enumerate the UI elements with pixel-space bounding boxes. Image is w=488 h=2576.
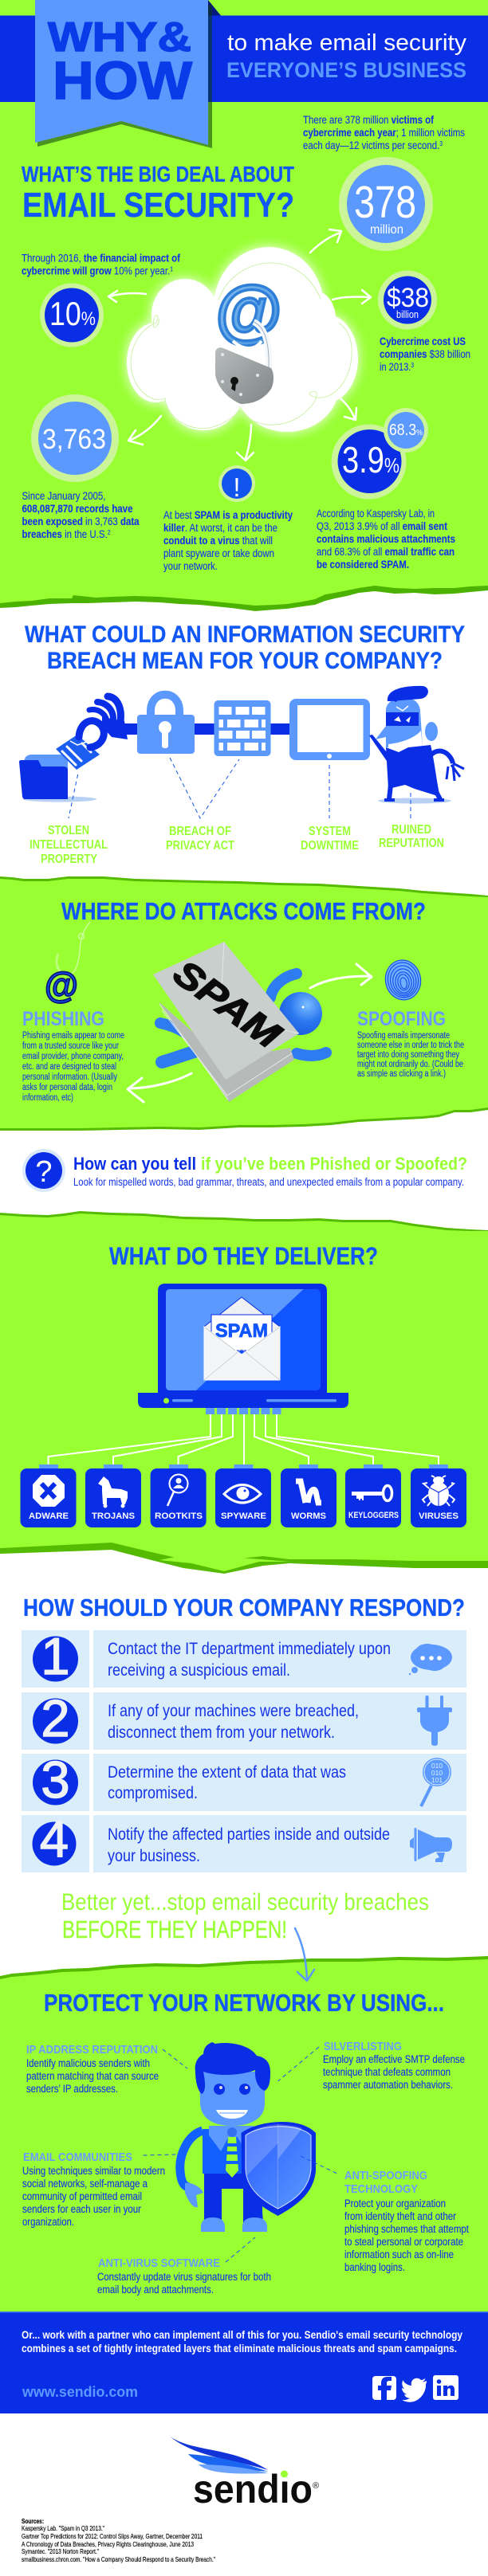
icon: folder <box>19 755 96 802</box>
text: silverlisting: Employ an effective SMTP defense <box>323 2053 465 2065</box>
text: silverlisting: technique that defeats common <box>323 2066 451 2078</box>
text: spoofing: as simple as clicking a link.) <box>357 1069 446 1079</box>
sources: Sources: <box>22 2517 44 2525</box>
text: financial impact: cybercrime will grow 10% per year. <box>22 265 181 277</box>
arrow: to phishing <box>128 1073 191 1102</box>
icon: plug <box>417 1696 452 1746</box>
section: deliver <box>0 1211 488 1574</box>
text: records: 608,087,870 records have <box>22 503 133 515</box>
arrow: to spam alert <box>237 425 254 461</box>
label: downtime: DOWNTIME <box>301 839 359 853</box>
step 3: 3 <box>41 1751 70 1809</box>
card: worms: WORMS <box>291 1511 326 1521</box>
stat: 3.9 percent: 3.9% <box>342 439 399 480</box>
step 3: compromised. <box>108 1784 198 1802</box>
icon: exclamation: ! <box>233 472 241 502</box>
sources: Symantec. "2013 Norton Report." <box>22 2547 99 2555</box>
text: email communities: Using techniques similar to modern <box>22 2165 165 2177</box>
stat: 3.9 percent <box>332 424 407 499</box>
labels: impacts <box>30 758 444 866</box>
text: anti-spoofing: to steal personal or corporate <box>344 2236 463 2248</box>
callout lines <box>144 2047 339 2262</box>
shield <box>241 2122 316 2216</box>
step 1: 1 <box>41 1627 70 1685</box>
text: anti-spoofing: banking logins. <box>344 2261 405 2273</box>
text: IP reputation <box>26 2043 159 2095</box>
text: spam: At best SPAM is a productivity <box>163 509 293 521</box>
text: IP reputation: pattern matching that can source <box>26 2070 159 2082</box>
title: how: HOW <box>53 51 193 111</box>
step 1 <box>22 1627 466 1688</box>
text: victims: 3 <box>439 140 443 147</box>
step 1: receiving a suspicious email. <box>108 1661 290 1680</box>
sources: Kaspersky Lab. "Spam in Q3 2013." <box>22 2524 104 2532</box>
stat: 3,763 <box>31 394 119 482</box>
heading: breach: BREACH MEAN FOR YOUR COMPANY? <box>47 648 443 674</box>
text: records: 2 <box>108 529 111 536</box>
card: keyloggers <box>345 1464 401 1527</box>
heading: big deal <box>22 162 294 225</box>
text: financial impact: 1 <box>170 266 173 272</box>
text: anti-virus: email body and attachments. <box>97 2284 214 2296</box>
envelope: SPAM <box>215 1320 268 1342</box>
partner text <box>22 2329 462 2354</box>
text: anti-spoofing: from identity theft and other <box>344 2210 456 2222</box>
text: IP reputation: senders’ IP addresses. <box>26 2083 118 2095</box>
text: kaspersky: and 68.3% of all email traffic can <box>317 546 455 558</box>
text: phishing: PHISHING <box>22 1008 104 1030</box>
step 4 <box>22 1809 466 1872</box>
text: phishing: asks for personal data, login <box>22 1083 112 1092</box>
step 2: If any of your machines were breached, <box>108 1702 359 1720</box>
icon: at sign and padlock <box>215 271 282 404</box>
text: spam: conduit to a virus that will <box>163 535 273 547</box>
stat: 68.3 percent <box>384 408 428 453</box>
text: cost: 3 <box>411 362 414 369</box>
logo: sendio: sendio <box>193 2467 313 2511</box>
label: spam: SPAM <box>166 951 289 1057</box>
logo: sendio <box>169 2436 319 2511</box>
icon: at sign and padlock: @ <box>215 271 282 350</box>
text: victims: cybercrime each year; 1 million victims <box>303 127 465 139</box>
card: spyware: SPYWARE <box>221 1511 266 1521</box>
title ribbon <box>35 0 221 148</box>
text: records: breaches in the U.S. <box>22 528 116 540</box>
heading: attacks: WHERE DO ATTACKS COME FROM? <box>61 897 426 925</box>
icon: fingerprint <box>382 957 423 1002</box>
illustration: man with shield <box>180 2042 316 2232</box>
text: silverlisting <box>323 2040 465 2091</box>
arrow: to 38 billion <box>333 290 371 304</box>
icon: thief <box>369 686 464 803</box>
step 2 <box>22 1689 466 1750</box>
text: records <box>22 490 140 540</box>
footer band <box>0 2311 488 2413</box>
card: worms <box>281 1464 336 1527</box>
text: kaspersky <box>317 508 455 570</box>
logo: sendio: ® <box>313 2481 319 2491</box>
text: anti-spoofing: phishing schemes that attempt <box>344 2223 469 2235</box>
text: victims <box>303 114 465 151</box>
text: kaspersky: contains malicious attachments <box>317 533 455 545</box>
text: victims: each day—12 victims per second. <box>303 139 465 151</box>
text: silverlisting: spammer automation behaviors. <box>323 2079 453 2091</box>
card: adware: ADWARE <box>29 1511 69 1521</box>
label: reputation: REPUTATION <box>379 837 444 850</box>
text: spoofing: SPOOFING <box>357 1008 446 1030</box>
text: email communities: organization. <box>22 2216 74 2228</box>
envelope <box>204 1297 280 1380</box>
callout: phished or spoofed: How can you tell <box>73 1154 196 1174</box>
section: respond <box>22 1594 466 1943</box>
stat: 3,763: 3,763 <box>42 424 106 455</box>
title: why: WHY& <box>48 14 191 61</box>
text: anti-virus: Constantly update virus signatures for both <box>97 2271 271 2283</box>
icon: fishing hook <box>57 922 90 974</box>
text: anti-spoofing: information such as on-line <box>344 2249 454 2260</box>
text: records: Since January 2005, <box>22 490 105 502</box>
arrow: to spoofing <box>310 964 372 988</box>
title band <box>0 16 488 102</box>
text: kaspersky: According to Kaspersky Lab, in <box>317 508 435 520</box>
text: email communities: senders for each user in your <box>22 2203 141 2215</box>
text: spam: killer. At worst, it can be the <box>163 522 277 534</box>
icon: tablet <box>289 699 370 760</box>
icon: linkedin <box>433 2375 458 2400</box>
text: anti-spoofing: TECHNOLOGY <box>344 2182 418 2196</box>
card: trojans <box>85 1464 141 1527</box>
card: trojans: TROJANS <box>92 1511 135 1521</box>
icon: laptop with spam email <box>138 1284 348 1414</box>
text: anti-spoofing <box>344 2169 469 2273</box>
tagline: to make email security <box>227 30 467 56</box>
icon: phishing at sign: @ <box>45 965 78 1006</box>
icon: spam envelope <box>153 942 299 1102</box>
text: cost: companies $38 billion <box>380 348 470 360</box>
text: email communities: social networks, self-manage a <box>22 2178 148 2190</box>
stat: 10 percent <box>40 284 104 347</box>
text: email communities <box>22 2151 165 2228</box>
necktie <box>226 2127 238 2178</box>
stat: 38 billion: $38 <box>387 283 429 313</box>
text: IP reputation: IP ADDRESS REPUTATION <box>26 2043 158 2056</box>
text: IP reputation: Identify malicious senders with <box>26 2057 150 2069</box>
website: www.sendio.com <box>22 2383 138 2400</box>
text: phishing: information, etc) <box>22 1093 73 1103</box>
card: keyloggers: KEYLOGGERS <box>348 1511 399 1520</box>
icon: hand holding document <box>56 696 128 770</box>
icon: exclamation <box>218 465 255 502</box>
text: phishing: etc. and are designed to steal <box>22 1062 116 1072</box>
label: privacy act <box>166 825 234 853</box>
callout: phished or spoofed <box>22 1149 467 1192</box>
arrow: to 3.9 percent <box>340 398 356 420</box>
step 2: 2 <box>41 1689 70 1747</box>
text: phishing: Phishing emails appear to come <box>22 1031 124 1041</box>
icon: question mark <box>22 1149 65 1192</box>
section: protect <box>0 1928 488 2319</box>
text: phishing: personal information. (Usually <box>22 1072 117 1082</box>
sources <box>22 2517 215 2563</box>
heading: big deal: WHAT’S THE BIG DEAL ABOUT <box>22 162 294 186</box>
text: anti-virus: ANTI-VIRUS SOFTWARE <box>98 2256 220 2270</box>
card: adware <box>21 1464 77 1527</box>
step 3 <box>22 1751 466 1811</box>
step 2: disconnect them from your network. <box>108 1723 335 1742</box>
heading: big deal: EMAIL SECURITY? <box>22 186 294 225</box>
card: viruses <box>411 1464 466 1527</box>
step 4: your business. <box>108 1847 200 1865</box>
heading: breach <box>25 621 465 674</box>
arrow: to 3,763 <box>128 416 161 445</box>
heading: deliver: WHAT DO THEY DELIVER? <box>109 1241 378 1270</box>
stat: 378 million: 378 <box>354 177 416 228</box>
text: anti-spoofing: Protect your organization <box>344 2198 446 2209</box>
label: stolen IP <box>30 824 108 866</box>
stat: 38 billion <box>378 271 437 330</box>
sources: A Chronology of Data Breaches, Privacy Rights Clearinghouse, June 2013 <box>22 2540 194 2548</box>
text: spoofing: Spoofing emails impersonate <box>357 1031 450 1041</box>
section: why and how <box>0 0 488 621</box>
label: downtime: SYSTEM <box>309 825 351 838</box>
card: spyware <box>215 1464 271 1527</box>
card: rootkits: ROOTKITS <box>155 1511 203 1521</box>
text: financial impact: Through 2016, the financial impact of <box>22 252 180 265</box>
icon: twitter <box>402 2378 427 2402</box>
text: silverlisting: SILVERLISTING <box>324 2040 402 2053</box>
arrow: to 10 percent <box>108 291 146 302</box>
icon: firewall <box>214 700 271 756</box>
icon: padlock <box>137 695 195 754</box>
text: email communities: community of permitted email <box>22 2190 142 2202</box>
section: breach <box>19 621 465 866</box>
icon: thought bubble <box>409 1644 452 1675</box>
text: victims: There are 378 million victims of <box>303 114 434 126</box>
text: spam: plant spyware or take down <box>163 547 274 559</box>
icon: binary magnifier: 101 <box>431 1776 443 1784</box>
step 1: Contact the IT department immediately upon <box>108 1640 391 1658</box>
stat: 38 billion: billion <box>396 309 419 320</box>
icon: question mark: ? <box>35 1155 53 1189</box>
icon: facebook <box>372 2376 396 2400</box>
label: privacy act: BREACH OF <box>169 825 231 838</box>
label: stolen IP: STOLEN <box>48 824 89 837</box>
text: anti-virus <box>97 2256 271 2296</box>
arrow: down to protect <box>295 1928 314 1981</box>
callout: better yet: BEFORE THEY HAPPEN! <box>62 1915 287 1943</box>
label: stolen IP: PROPERTY <box>41 853 98 866</box>
text: spoofing <box>357 1008 464 1079</box>
step 3: Determine the extent of data that was <box>108 1763 346 1782</box>
text: cost <box>380 335 470 373</box>
step 4: Notify the affected parties inside and outside <box>108 1825 390 1844</box>
section: attacks <box>0 876 488 1192</box>
icon: binary magnifier: 010 <box>431 1762 443 1770</box>
cloud <box>126 246 359 433</box>
label: downtime <box>301 825 359 853</box>
step 4: 4 <box>40 1809 69 1868</box>
icon: spam figure <box>160 974 326 1062</box>
stat: 68.3 percent: 68.3% <box>389 421 423 439</box>
icon: megaphone <box>410 1828 452 1862</box>
text: cost: Cybercrime cost US <box>380 335 466 347</box>
callout: better yet: Better yet...stop email security breaches <box>61 1889 429 1915</box>
label: stolen IP: INTELLECTUAL <box>30 838 108 852</box>
callout: better yet <box>61 1889 429 1943</box>
text: spoofing: target into doing something they <box>357 1050 459 1060</box>
sources: Gartner Top Predictions for 2012: Control Slips Away, Gartner, December 2011 <box>22 2532 203 2540</box>
label: privacy act: PRIVACY ACT <box>166 839 234 853</box>
stat: 378 million <box>339 157 433 251</box>
card: rootkits <box>151 1464 207 1527</box>
text: spam <box>163 509 293 572</box>
text: spam: your network. <box>163 560 218 572</box>
tagline highlight: EVERYONE’S BUSINESS <box>226 58 466 82</box>
text: kaspersky: Q3, 2013 3.9% of all email sent <box>317 520 447 532</box>
label: reputation <box>379 823 444 850</box>
text: financial impact <box>22 252 180 277</box>
stat: 10 percent: 10% <box>49 295 96 332</box>
sources: smallbusiness.chron.com. "How a Company Should Respond to a Security Breach." <box>22 2555 215 2563</box>
text: phishing: from a trusted source like your <box>22 1041 119 1051</box>
text: phishing <box>22 1008 124 1103</box>
icon: binary magnifier: 010 <box>431 1769 443 1777</box>
text: email communities: EMAIL COMMUNITIES <box>23 2151 132 2164</box>
icon: binary magnifier <box>421 1758 451 1806</box>
label: reputation: RUINED <box>392 823 431 837</box>
arrow: to 378 <box>310 229 341 253</box>
card: viruses: VIRUSES <box>419 1511 458 1521</box>
text: phishing: email provider, phone company, <box>22 1052 124 1061</box>
text: anti-spoofing: ANTI-SPOOFING <box>344 2169 427 2182</box>
text: kaspersky: be considered SPAM. <box>317 559 409 570</box>
text: cost: in 2013. <box>380 361 418 373</box>
text: records: been exposed in 3,763 data <box>22 516 140 527</box>
stat: 378 million: million <box>370 223 403 237</box>
